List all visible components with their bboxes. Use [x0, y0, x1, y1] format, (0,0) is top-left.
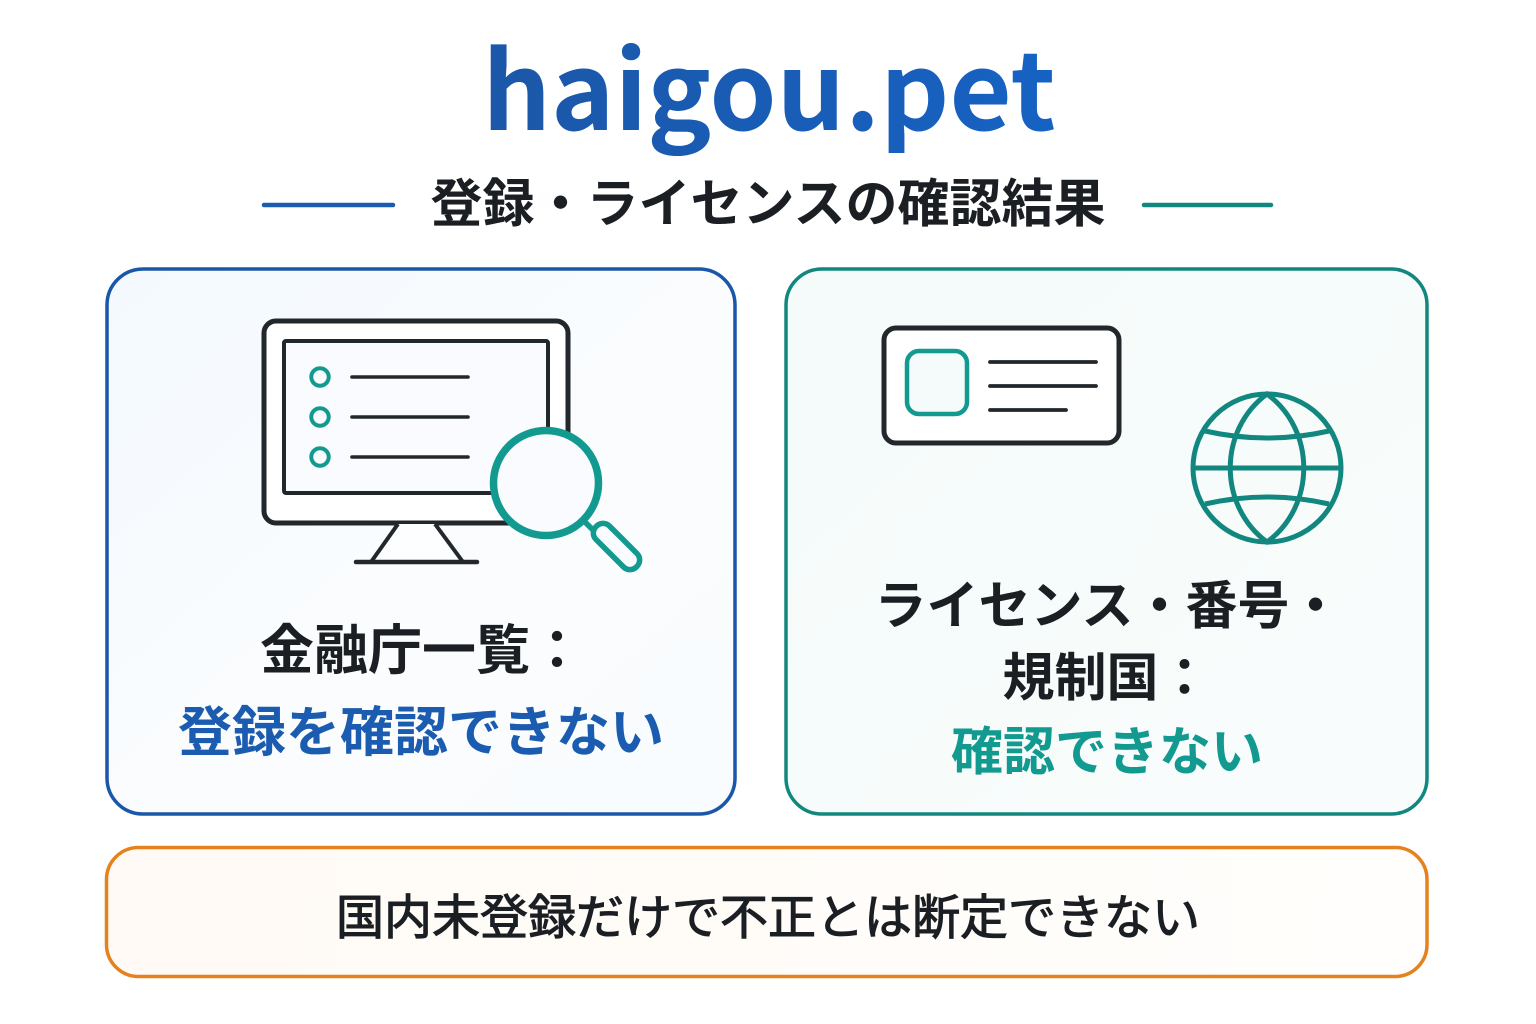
status: not registered: 登録を確認できない	[178, 688, 664, 767]
callout: 国内未登録だけで不正とは断定できない	[336, 878, 1200, 948]
icon: monitor with list	[264, 321, 568, 562]
panel: FSA list	[107, 269, 735, 814]
status: unverifiable: 確認できない	[951, 710, 1263, 785]
title: haigou.pet	[482, 5, 1056, 161]
icon: magnifier	[494, 430, 643, 573]
label: license: ライセンス・番号・	[874, 564, 1341, 639]
panel: license	[786, 269, 1427, 814]
callout	[106, 848, 1427, 976]
subtitle with side rules: 登録・ライセンスの確認結果	[431, 162, 1105, 237]
label: FSA list: 金融庁一覧：	[260, 606, 584, 685]
icon: globe	[1193, 394, 1341, 542]
label: regulator: 規制国：	[1002, 636, 1211, 711]
icon: license card	[884, 328, 1119, 443]
